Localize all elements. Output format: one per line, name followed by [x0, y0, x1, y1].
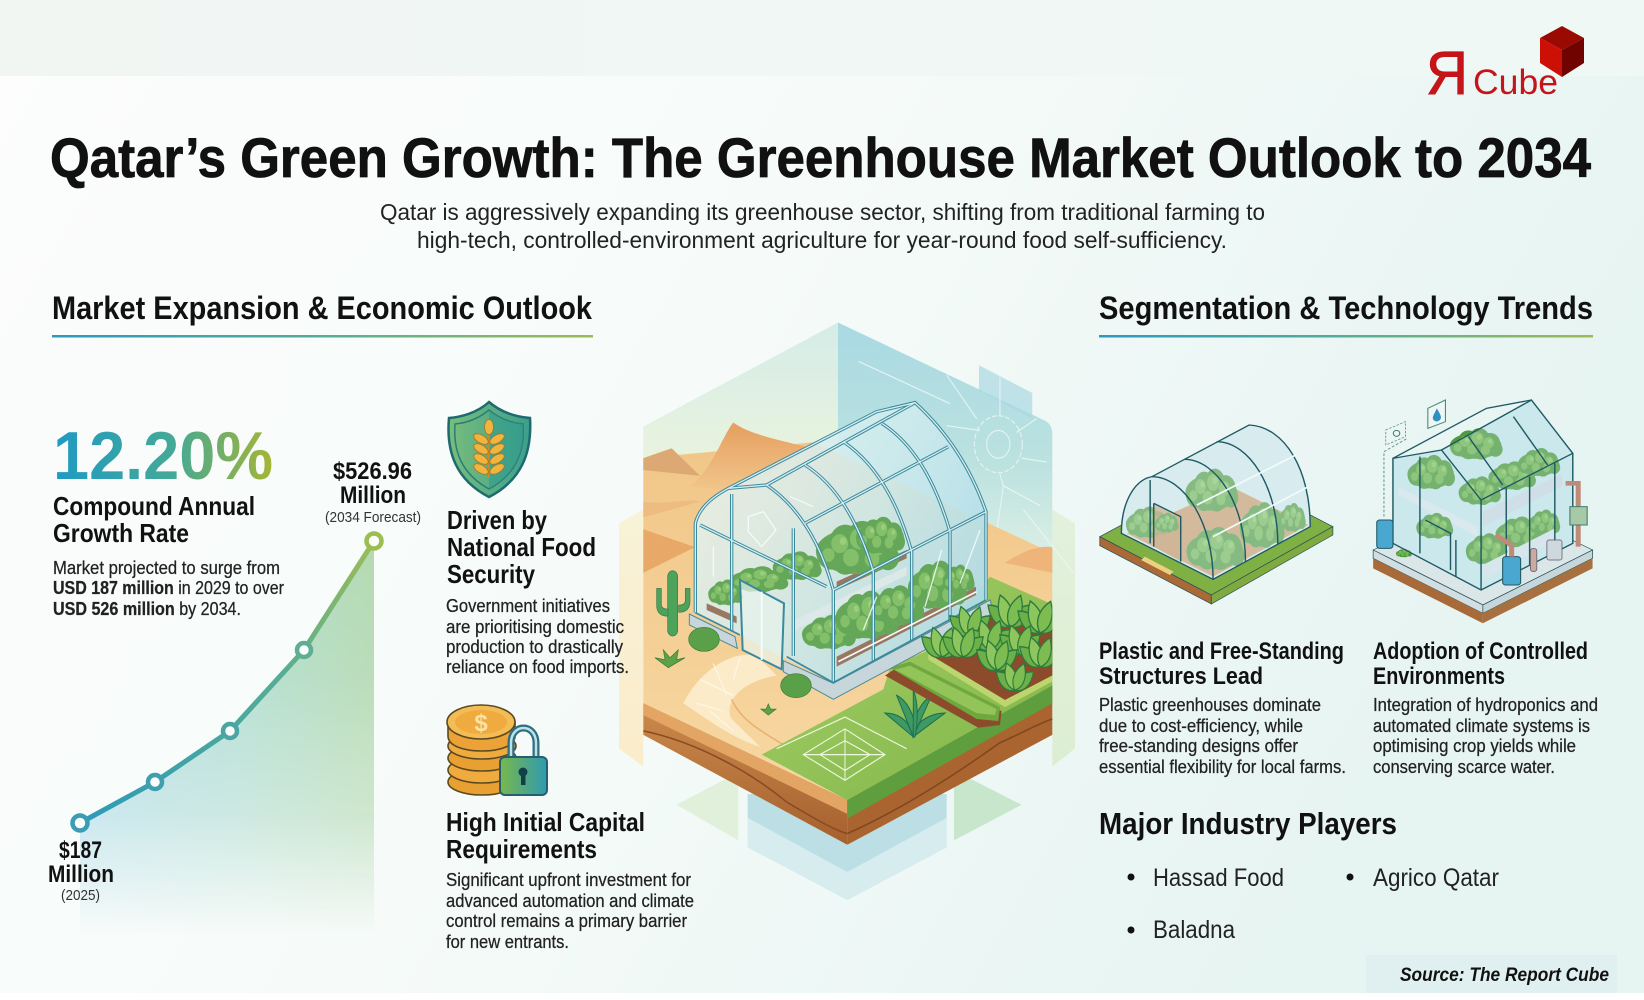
- lawn sensor grid: [777, 717, 907, 780]
- text block: capital requirements: advanced automation and climate: [446, 891, 694, 911]
- central illustration: glass greenhouse: [689, 403, 994, 699]
- greenhouse glass sheen: [695, 403, 986, 683]
- CAGR stat: 12.20%: [53, 418, 273, 494]
- CAGR description: USD 187 million in 2029 to over: [53, 578, 284, 598]
- text block: capital requirements: control remains a primary barrier: [446, 911, 687, 931]
- stone path: [683, 655, 787, 747]
- text block: controlled environments: optimising crop yields while: [1373, 736, 1576, 756]
- text block: controlled environments: Integration of hydroponics and: [1373, 695, 1598, 715]
- icon: shield with wheat: [448, 402, 530, 497]
- greenhouse base: [689, 600, 994, 699]
- hexagon backdrop: [619, 323, 1075, 900]
- text block: food security: reliance on food imports.: [446, 657, 629, 677]
- list: industry players: [1128, 864, 1499, 944]
- source note: [1366, 955, 1617, 993]
- CAGR label: [53, 491, 255, 548]
- hedge row: [885, 662, 1002, 728]
- text block: plastic structures: essential flexibility for local farms.: [1099, 757, 1346, 777]
- circuit overlay lines: [858, 361, 1073, 573]
- logo: RCube: [1426, 26, 1584, 107]
- list: industry players: Hassad Food: [1153, 864, 1284, 892]
- chart label: 2034 value: [325, 458, 421, 526]
- chart label: 2025 value: (2025): [61, 887, 100, 904]
- plastic tunnel greenhouse: [1100, 425, 1333, 604]
- CAGR label: Growth Rate: [53, 518, 189, 548]
- CAGR label: Compound Annual: [53, 491, 255, 521]
- list: industry players: Baladna: [1153, 916, 1235, 944]
- text block: controlled environments: automated climate systems is: [1373, 716, 1590, 736]
- text block: controlled environments: Adoption of Controlled: [1373, 638, 1588, 665]
- source note: Source: The Report Cube: [1400, 965, 1609, 986]
- line chart: market growth: [72, 534, 382, 933]
- central illustration: desert island terrain: [619, 323, 1075, 900]
- sand terrain: [643, 442, 1052, 800]
- text block: food security: [446, 505, 629, 677]
- CAGR description: USD 526 million by 2034.: [53, 599, 241, 619]
- text block: controlled environments: conserving scarce water.: [1373, 757, 1555, 777]
- chart label: 2025 value: Million: [48, 861, 114, 888]
- icon: coins and padlock: $: [474, 710, 488, 737]
- list: industry players: Agrico Qatar: [1373, 864, 1499, 892]
- text block: plastic structures: due to cost-efficiency, while: [1099, 716, 1303, 736]
- chart label: 2025 value: $187: [59, 837, 102, 864]
- chart label: 2034 value: (2034 Forecast): [325, 509, 421, 526]
- cactus: [657, 571, 690, 636]
- text block: capital requirements: High Initial Capital: [446, 807, 645, 837]
- text block: food security: Government initiatives: [446, 596, 610, 616]
- small desert plants: [655, 650, 776, 715]
- shrubs by greenhouse: [689, 627, 811, 698]
- text block: food security: Driven by: [447, 505, 547, 535]
- text block: plastic structures: [1099, 638, 1346, 777]
- chart label: 2034 value: Million: [340, 482, 406, 509]
- text block: capital requirements: Significant upfront investment for: [446, 870, 691, 890]
- text block: plastic structures: Structures Lead: [1099, 663, 1263, 690]
- heading: major industry players: Major Industry Players: [1099, 806, 1397, 841]
- text block: capital requirements: [446, 807, 694, 952]
- subtitle: high-tech, controlled-environment agriculture for year-round food self-sufficiency.: [417, 227, 1227, 253]
- greenhouse soil beds: [707, 550, 976, 667]
- text block: controlled environments: [1373, 638, 1598, 777]
- heading: segmentation: Segmentation & Technology Trends: [1099, 290, 1593, 326]
- hydroponic controlled greenhouse: [1373, 400, 1593, 623]
- soil edge right: [847, 685, 1052, 845]
- text block: controlled environments: Environments: [1373, 663, 1505, 690]
- text block: food security: production to drastically: [446, 637, 623, 657]
- subtitle: [380, 199, 1265, 253]
- chart label: 2025 value: [48, 837, 114, 904]
- text block: food security: are prioritising domestic: [446, 617, 624, 637]
- dunes: [643, 423, 1052, 573]
- subtitle: Qatar is aggressively expanding its greenhouse sector, shifting from traditional farming to: [380, 199, 1265, 225]
- logo: RCube: Я: [1426, 39, 1468, 107]
- text block: capital requirements: Requirements: [446, 834, 597, 864]
- greenhouse highlight lines: [713, 497, 980, 630]
- greenhouse emblem: [748, 512, 776, 547]
- agave plant: [885, 689, 945, 737]
- text block: food security: Security: [447, 559, 535, 589]
- CAGR description: [53, 558, 284, 619]
- icon: coins and padlock: [447, 705, 547, 795]
- text block: capital requirements: for new entrants.: [446, 932, 569, 952]
- greenhouse door: [740, 580, 784, 669]
- soil edge left: [643, 703, 847, 845]
- raised bed soil: [928, 604, 1052, 707]
- text block: food security: National Food: [447, 532, 596, 562]
- text block: plastic structures: Plastic and Free-Standing: [1099, 638, 1344, 665]
- heading: market expansion: Market Expansion & Economic Outlook: [52, 290, 592, 326]
- lawn: [762, 577, 1052, 800]
- greenhouse plants: [708, 517, 975, 649]
- chart label: 2034 value: $526.96: [333, 458, 412, 485]
- illustrations: small greenhouses: [1100, 400, 1593, 623]
- CAGR description: Market projected to surge from: [53, 558, 280, 578]
- greenhouse glass body: [695, 403, 986, 683]
- greenhouse frame: [695, 403, 986, 683]
- text block: plastic structures: free-standing designs offer: [1099, 736, 1298, 756]
- raised vegetable bed plants: [921, 594, 1052, 692]
- text block: plastic structures: Plastic greenhouses dominate: [1099, 695, 1321, 715]
- logo: RCube: Cube: [1473, 63, 1558, 102]
